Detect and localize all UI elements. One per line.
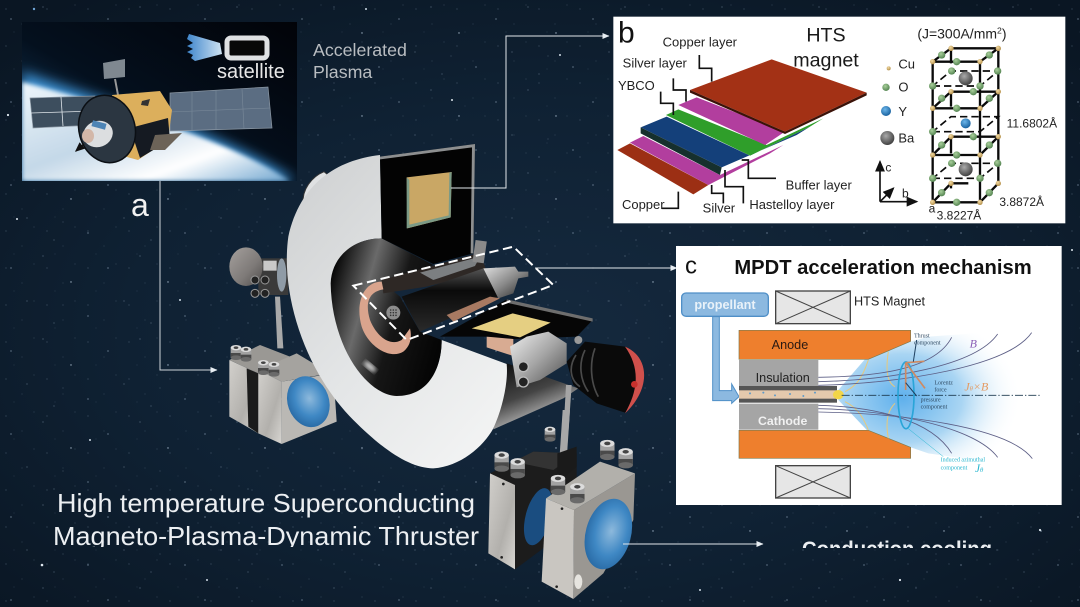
small annotations bbox=[914, 333, 953, 411]
white disk bbox=[287, 155, 507, 468]
label: b: b bbox=[618, 17, 635, 50]
axis labels: c bbox=[885, 161, 891, 175]
panel a: satellite image bbox=[22, 22, 297, 181]
vertical rod bbox=[559, 410, 570, 460]
anode bbox=[739, 330, 911, 359]
layer labels: Silver bbox=[703, 200, 736, 215]
front block bbox=[542, 462, 635, 599]
current density label: 2 bbox=[997, 25, 1002, 35]
upper sliced wedge bbox=[382, 253, 487, 293]
label: conduction cooling: Conduction cooling bbox=[802, 538, 992, 561]
arrow: satellite thrust direction bbox=[76, 144, 84, 151]
copper lead bbox=[487, 337, 513, 356]
satellite: gold body bbox=[112, 91, 172, 160]
centre axis bbox=[842, 394, 1040, 397]
current density label: (J=300A/mm bbox=[917, 25, 997, 41]
label: HTS Magnet: HTS Magnet bbox=[854, 294, 926, 308]
current lines bbox=[845, 352, 895, 438]
label: a: a bbox=[131, 187, 149, 223]
title: HTS magnet: HTS bbox=[806, 25, 846, 47]
induced azimuthal label: Jθ bbox=[975, 463, 984, 475]
insulation bbox=[739, 360, 818, 386]
central black tube bbox=[402, 267, 528, 332]
perforated nozzle bbox=[386, 306, 400, 320]
earth limb glow bbox=[22, 72, 297, 181]
rear block bbox=[488, 452, 577, 569]
top tape sample bbox=[407, 172, 452, 228]
satellite: right solar array bbox=[170, 87, 272, 131]
satellite: dark front disc bbox=[78, 94, 136, 164]
copper ring bbox=[359, 282, 411, 354]
panel c: MPDT acceleration mechanism bbox=[676, 246, 1062, 505]
insulation: Insulation bbox=[756, 371, 810, 385]
propellant box bbox=[682, 293, 768, 316]
small annotations: component bbox=[914, 341, 941, 347]
propellant arrow bbox=[713, 317, 739, 403]
title: HTS magnet: magnet bbox=[793, 50, 859, 72]
lower black tray bbox=[440, 299, 593, 339]
right clamp bbox=[510, 332, 582, 387]
right support rod bbox=[563, 385, 572, 433]
blue dome bbox=[577, 493, 640, 575]
rear block bolts bbox=[494, 427, 555, 478]
cathode: Cathode bbox=[758, 414, 807, 428]
top magnet coil bbox=[776, 291, 850, 324]
right black cylinder with red rim bbox=[567, 342, 644, 413]
label: satellite: satellite bbox=[217, 61, 285, 83]
axis labels: a bbox=[929, 201, 936, 215]
satellite: lower struts bbox=[150, 133, 182, 150]
title text: High temperature Superconducting bbox=[57, 488, 475, 518]
atom legend: Cu bbox=[898, 56, 915, 71]
plasma plume bbox=[838, 330, 1022, 467]
left bracket, rear block bbox=[229, 345, 290, 433]
layer labels: Hastelloy layer bbox=[749, 197, 835, 212]
layer stack bbox=[617, 59, 867, 194]
induced azimuthal label: component bbox=[941, 465, 968, 471]
title text bbox=[55, 493, 479, 547]
layer labels: Copper bbox=[622, 197, 665, 212]
force vectors bbox=[906, 340, 925, 396]
label: accelerated plasma: Accelerated bbox=[313, 40, 407, 60]
induced azimuthal label bbox=[908, 429, 985, 475]
atom legend: Ba bbox=[898, 130, 915, 145]
label: c: c bbox=[685, 252, 697, 279]
title text: Magneto-Plasma-Dynamic Thruster bbox=[53, 521, 479, 551]
panel b: HTS magnet bbox=[613, 17, 1065, 223]
axis labels: b bbox=[902, 186, 909, 200]
spark at nozzle bbox=[833, 390, 844, 399]
layer labels: Copper layer bbox=[663, 35, 738, 50]
small annotations: Lorentz bbox=[934, 380, 953, 386]
black top panel bbox=[380, 144, 475, 264]
dashed selection box bbox=[353, 247, 553, 340]
satellite: antenna bbox=[103, 59, 125, 95]
atom legend: O bbox=[898, 80, 908, 95]
icon: satellite with plasma plume bbox=[187, 34, 267, 61]
crystal lattice bbox=[929, 46, 1001, 206]
connector arrow: cooling bbox=[623, 543, 763, 545]
left connector bbox=[229, 247, 288, 297]
rod clamp bbox=[557, 447, 577, 478]
induced current ring bbox=[898, 362, 914, 429]
JxB label: Jθ×B bbox=[964, 380, 989, 394]
small annotations: force bbox=[934, 386, 947, 393]
lattice dimensions: 11.6802Å bbox=[1007, 115, 1057, 130]
lower tape sample bbox=[472, 313, 551, 337]
axes bbox=[880, 162, 917, 202]
front block bolts bbox=[551, 440, 633, 503]
rear ring bbox=[303, 172, 330, 205]
layer labels: YBCO bbox=[618, 78, 655, 93]
left bracket, front block bbox=[258, 353, 337, 444]
small annotations: pressure bbox=[921, 397, 941, 403]
left blue dome bbox=[280, 370, 337, 433]
cathode bbox=[739, 404, 818, 430]
connector arrow: satellite to thruster bbox=[160, 181, 217, 370]
lower electrode bbox=[739, 430, 911, 458]
layer labels bbox=[618, 35, 852, 215]
B vector label: B bbox=[970, 336, 978, 350]
lower bracket assembly bbox=[488, 410, 640, 599]
connector arrow: magnet to panel b bbox=[451, 36, 609, 188]
layer labels: Buffer layer bbox=[786, 177, 852, 192]
left bracket bolts bbox=[231, 345, 279, 377]
cone body behind disk bbox=[493, 363, 578, 429]
propellant box: propellant bbox=[694, 298, 756, 312]
satellite: left solar array bbox=[30, 96, 95, 128]
axis labels bbox=[885, 161, 936, 215]
title: HTS magnet bbox=[793, 25, 859, 72]
small annotations: component bbox=[921, 405, 948, 411]
atom legend bbox=[880, 56, 915, 145]
current density label: ) bbox=[1002, 25, 1007, 41]
atom legend: Y bbox=[898, 104, 907, 119]
inner bore bbox=[331, 238, 442, 396]
label: accelerated plasma: Plasma bbox=[313, 62, 372, 82]
small annotations: Thrust bbox=[914, 333, 930, 339]
lattice dimensions: 3.8227Å bbox=[937, 207, 981, 222]
propellant channel bbox=[739, 386, 837, 403]
left support rod bbox=[275, 297, 283, 348]
leader lines bbox=[661, 55, 776, 208]
connector arrow: dashed box to panel c bbox=[535, 267, 677, 269]
inner blue dome bbox=[519, 485, 558, 548]
anode: Anode bbox=[772, 338, 808, 352]
lattice dimensions bbox=[937, 115, 1057, 222]
magnetic field lines bbox=[818, 333, 1032, 459]
lattice dimensions: 3.8872Å bbox=[999, 194, 1044, 209]
induced azimuthal label: Induced azimuthal bbox=[941, 458, 985, 464]
title: MPDT acceleration mechanism bbox=[734, 257, 1032, 279]
earth surface bbox=[22, 82, 290, 181]
bottom magnet coil bbox=[776, 466, 850, 498]
satellite: thruster on disc bbox=[82, 120, 113, 148]
label: accelerated plasma bbox=[313, 40, 407, 82]
layer labels: Silver layer bbox=[623, 55, 688, 70]
thruster assembly bbox=[229, 144, 644, 468]
